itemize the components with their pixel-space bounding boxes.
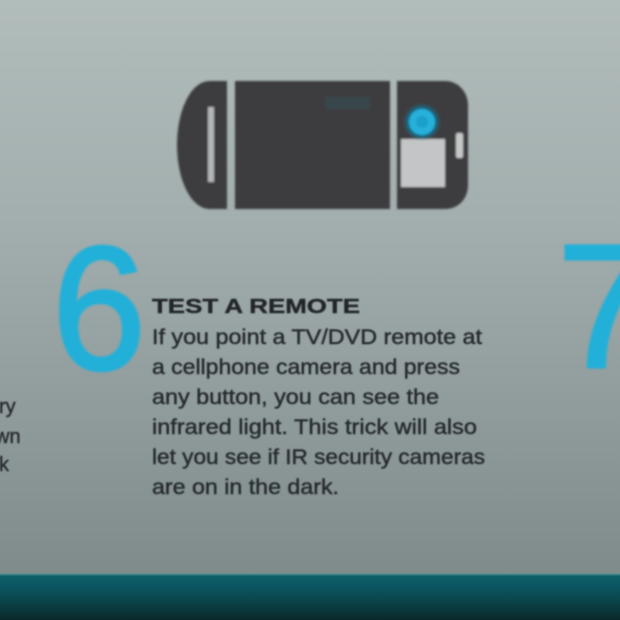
body text: infrared light. This trick will also <box>152 416 477 439</box>
icon: cellphone camera <box>177 81 468 209</box>
body text: are on in the dark. <box>152 476 339 499</box>
step number 6: 6 <box>52 210 146 407</box>
previous step text fragment <box>0 396 21 476</box>
body text: any button, you can see the <box>152 386 439 409</box>
footer band <box>0 573 620 620</box>
body text: let you see if IR security cameras <box>152 446 485 469</box>
heading: test a remote: TEST A REMOTE <box>152 296 360 318</box>
body text: a cellphone camera and press <box>152 356 460 379</box>
body text: If you point a TV/DVD remote at <box>152 326 482 349</box>
body text <box>152 326 485 499</box>
